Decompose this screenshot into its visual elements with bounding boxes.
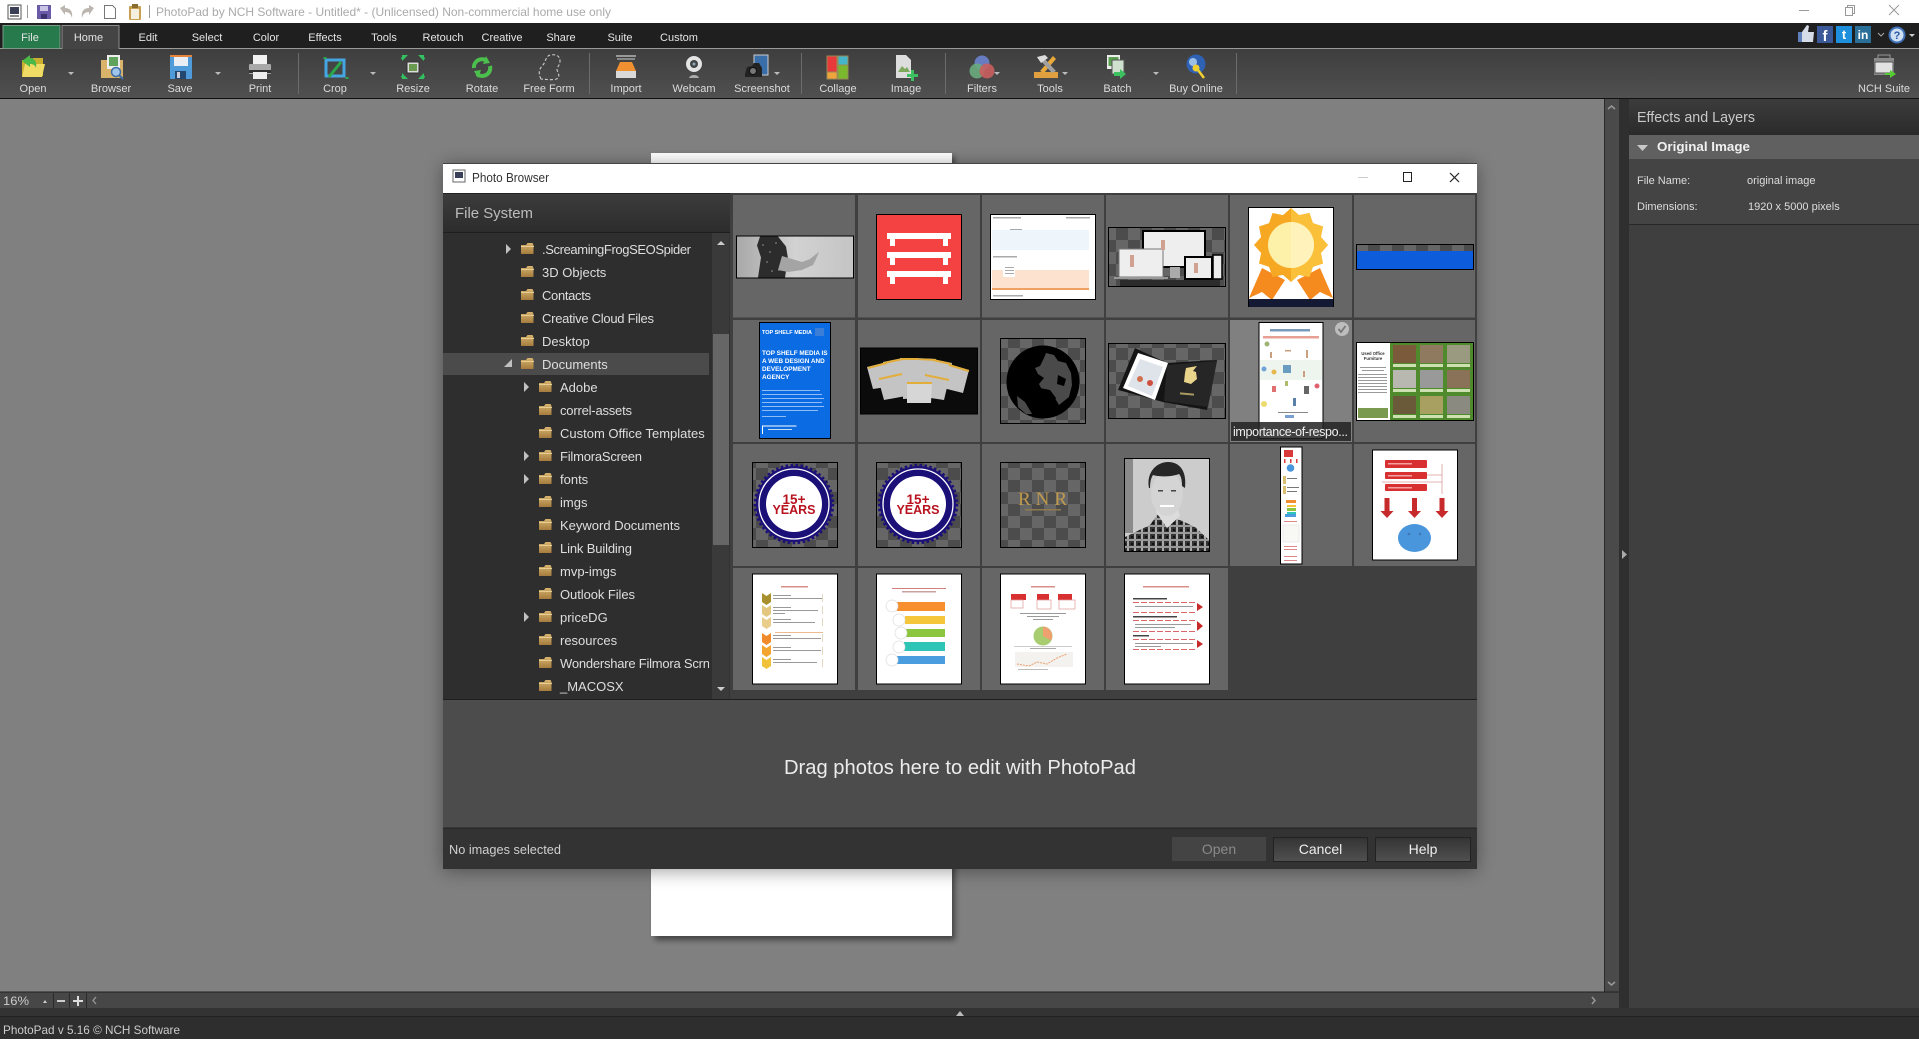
image properties: original image (1747, 175, 1815, 187)
image properties: Dimensions: (1637, 201, 1698, 213)
tree scrollbar (712, 233, 729, 699)
folder names: imgs (560, 495, 588, 510)
dialog footer (443, 828, 1477, 869)
image properties: File Name: (1637, 175, 1690, 187)
file system header (443, 194, 730, 233)
grid cells (733, 195, 1475, 690)
folder names (542, 242, 710, 694)
expand arrows (504, 244, 529, 622)
drag and drop area: Drag photos here to edit with PhotoPad (784, 757, 1136, 779)
toolbar labels: NCH Suite (1858, 83, 1910, 95)
toolbar labels: Collage (819, 83, 857, 95)
tab labels: Color (253, 32, 279, 44)
folder names: Documents (542, 357, 608, 372)
tab: File: File (21, 32, 39, 44)
ribbon tab bar (0, 23, 1919, 50)
icon: rotate (474, 56, 490, 78)
folder names: _MACOSX (559, 679, 624, 694)
folder names: correl-assets (560, 403, 632, 418)
thumbnail: award sun (1248, 208, 1334, 307)
toolbar (0, 49, 1919, 99)
thumbnail: RNR logo: RNR (1018, 489, 1072, 510)
toolbar labels: Webcam (672, 83, 716, 95)
icon: buy online (1186, 54, 1206, 78)
thumbnail: 15+ years badge copy: YEARS (896, 503, 940, 517)
thumbnail: top shelf media page: TOP SHELF MEDIA IS (762, 350, 828, 357)
toolbar labels: Save (167, 83, 193, 95)
canvas scrollbars and zoom bar (0, 99, 1629, 1008)
folder names: 3D Objects (542, 265, 607, 280)
thumbnail: top shelf media page: AGENCY (762, 374, 790, 381)
dialog title bar (443, 163, 1477, 194)
tab labels: Edit (139, 32, 157, 44)
original image section header (1629, 135, 1919, 159)
social and help icons: ? (1894, 30, 1901, 42)
icon: filters (970, 56, 994, 78)
thumbnail: hand (736, 236, 854, 278)
folder tree (443, 233, 729, 699)
selected check badge (1335, 322, 1349, 336)
toolbar labels: Print (249, 83, 271, 95)
panel heading (1629, 99, 1919, 135)
toolbar labels: Crop (323, 83, 347, 95)
toolbar labels: Open (20, 83, 46, 95)
folder names: resources (560, 633, 618, 648)
image properties: 1920 x 5000 pixels (1748, 201, 1840, 213)
dialog title bar: Photo Browser (472, 171, 549, 185)
icon: new document (104, 6, 116, 18)
thumbnail: 15+ years badge: YEARS (772, 503, 816, 517)
thumbnail: infographic stack (860, 348, 978, 414)
file system header: File System (455, 205, 533, 222)
toolbar labels: Import (610, 83, 642, 95)
tab: Home (62, 26, 119, 50)
toolbar labels: Browser (91, 83, 132, 95)
social and help icons: t (1842, 27, 1847, 42)
tab labels: Suite (607, 32, 633, 44)
folder names: Contacts (542, 288, 592, 303)
icon: crop (325, 57, 347, 79)
thumbnail: responsive devices (1108, 228, 1226, 286)
thumbnail: top shelf media page (760, 322, 830, 438)
panel collapse handle (1622, 550, 1627, 559)
icon: print (249, 55, 271, 79)
button: open (1172, 837, 1266, 861)
panel heading: Effects and Layers (1637, 109, 1755, 126)
icon: import (616, 55, 636, 78)
folder icons (521, 243, 552, 691)
folder names: Keyword Documents (560, 518, 680, 533)
folder names: Adobe (560, 380, 598, 395)
thumbnail: top shelf media page: DEVELOPMENT (762, 366, 811, 373)
icon: browser (101, 55, 123, 79)
selected row (443, 353, 709, 375)
icon: free form (539, 55, 560, 80)
effects and layers panel (1622, 99, 1919, 1008)
icon: clipboard (129, 4, 141, 20)
icon: app (8, 5, 21, 19)
icon: screenshot (745, 55, 768, 77)
button: help: Help (1409, 841, 1438, 857)
thumbnail: 15+ years badge: 15+ (783, 492, 806, 507)
dialog: photo browser (443, 163, 1477, 869)
icon: collage (827, 56, 848, 79)
tab labels: Share (546, 32, 576, 44)
status bar (0, 1008, 1919, 1039)
thumbnail: globe (1000, 338, 1086, 424)
thumbnail grid (730, 193, 1477, 699)
toolbar labels: Rotate (466, 83, 498, 95)
icon: save (170, 55, 192, 79)
tab labels: Creative (482, 32, 522, 44)
folder names: Link Building (560, 541, 632, 556)
thumbnail: office furniture: Used Office (1361, 351, 1385, 356)
thumbnail: red dashed text list (1124, 574, 1210, 684)
folder names: Outlook Files (560, 587, 636, 602)
icon: webcam (686, 56, 702, 78)
selection status: No images selected (449, 843, 561, 857)
toolbar separators (298, 53, 1237, 94)
folder names: .ScreamingFrogSEOSpider (542, 242, 692, 257)
icon: resize (402, 55, 424, 79)
tab labels: Custom (660, 32, 698, 44)
icon: redo (82, 5, 94, 18)
tab: Home: Home (74, 32, 103, 44)
thumbnail: top shelf media page: A WEB DESIGN AND (762, 358, 825, 365)
drag and drop area (443, 699, 1477, 828)
toolbar labels: Tools (1037, 83, 1063, 95)
window title: PhotoPad by NCH Software - Untitled* - (Unlicensed) Non-commercial home use only (156, 5, 611, 19)
tab labels (139, 32, 698, 44)
thumbnail: analytics chart (990, 214, 1096, 300)
toolbar labels: Buy Online (1169, 83, 1223, 95)
toolbar labels: Free Form (523, 83, 575, 95)
tab labels: Select (192, 32, 222, 44)
thumbnail: office furniture: Furniture (1364, 356, 1383, 361)
icon: batch (1107, 55, 1126, 79)
toolbar labels: Batch (1103, 83, 1132, 95)
thumbnail: red shelf logo (876, 214, 962, 300)
button: cancel (1274, 838, 1368, 862)
icon: image (896, 55, 918, 81)
folder names: priceDG (560, 610, 608, 625)
thumbnail: tall infographic (1280, 447, 1302, 564)
toolbar labels (20, 83, 1910, 95)
folder names: fonts (560, 472, 589, 487)
folder names: Desktop (542, 334, 590, 349)
thumbnail: 15+ years badge (752, 462, 838, 548)
toolbar labels: Resize (396, 83, 430, 95)
window title bar (0, 0, 1919, 23)
dropdown arrows (68, 72, 1159, 75)
thumbnail: top shelf media page: TOP SHELF MEDIA (762, 330, 812, 336)
folder names: Custom Office Templates (560, 426, 705, 441)
icon: NCH suite (1874, 55, 1896, 78)
thumbnail: office furniture (1356, 342, 1474, 420)
icon: save (37, 5, 51, 19)
thumbnail: blue banner (1356, 244, 1474, 270)
icon: undo (60, 5, 72, 18)
document page behind dialog (651, 153, 955, 940)
window controls (1799, 5, 1899, 16)
icon: tools (1034, 55, 1058, 78)
image properties (1629, 159, 1919, 225)
thumbnail: selected responsive infographic (1259, 322, 1323, 438)
thumbnail: book mockup (1108, 344, 1226, 418)
folder names: Wondershare Filmora Scrn (560, 656, 710, 671)
thumbnail: portrait (1124, 458, 1210, 552)
icon: open (22, 55, 45, 77)
dialog shadow (443, 165, 1477, 871)
selected file name label: importance-of-respo... (1233, 425, 1348, 439)
thumbnail: chevron list (752, 574, 838, 684)
button: open: Open (1202, 841, 1236, 857)
thumbnail: RNR logo (1000, 462, 1086, 548)
toolbar labels: Filters (967, 83, 997, 95)
zoom controls (43, 993, 96, 1008)
thumbnail: red bars and arrows (1372, 450, 1458, 560)
thumbnail: coloured bars (876, 574, 962, 684)
thumbnail: chart infographic (1000, 574, 1086, 684)
social and help icons: f (1822, 28, 1828, 45)
canvas background (0, 99, 1604, 992)
toolbar labels: Image (891, 83, 921, 95)
status bar: PhotoPad v 5.16 © NCH Software (3, 1023, 180, 1037)
tab labels: Retouch (423, 32, 463, 44)
folder names: Creative Cloud Files (542, 311, 654, 326)
zoom level: 16% (3, 994, 29, 1008)
social and help icons: in (1858, 28, 1868, 42)
tab labels: Effects (308, 32, 342, 44)
folder names: FilmoraScreen (560, 449, 642, 464)
toolbar labels: Screenshot (734, 83, 790, 95)
folder names: mvp-imgs (560, 564, 617, 579)
button: help (1376, 838, 1470, 862)
button: cancel: Cancel (1299, 841, 1342, 857)
social and help icons (1798, 25, 1915, 45)
thumbnail: 15+ years badge copy (876, 462, 962, 548)
original image section header: Original Image (1657, 139, 1750, 154)
thumbnail: 15+ years badge copy: 15+ (907, 492, 930, 507)
tab labels: Tools (371, 32, 397, 44)
tab: File (3, 26, 60, 48)
